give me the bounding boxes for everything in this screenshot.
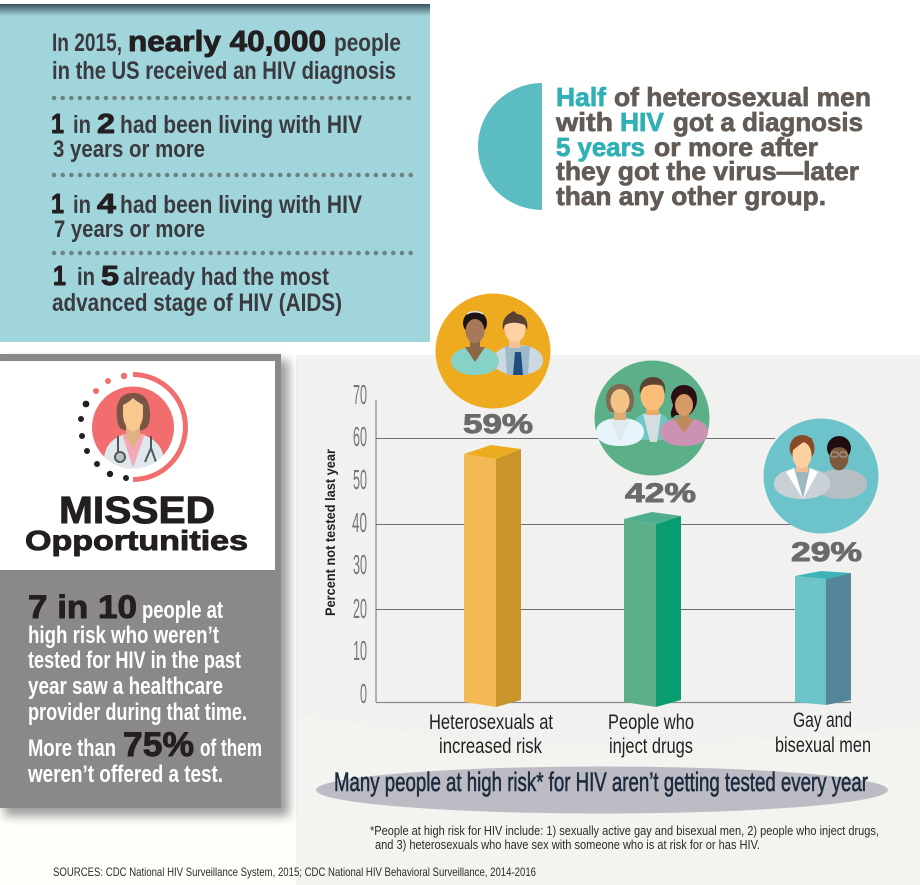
stat: 1 in 5 — [52, 260, 342, 317]
text: 7 in 10 statistic: high risk who weren’t — [28, 622, 219, 649]
text: 7 in 10 statistic — [28, 589, 247, 726]
panel: diagnosis statistics — [0, 4, 430, 342]
bar: gay and bisexual men 29% — [795, 571, 851, 705]
stat: 1 in 4: 4 — [97, 188, 117, 219]
text: more than 75 percent: weren’t offered a test. — [27, 761, 223, 788]
callout text: Half — [556, 82, 606, 112]
callout text: with — [555, 107, 613, 137]
sources: SOURCES: CDC National HIV Surveillance System, 2015; CDC National HIV Behavioral Surveillance, 2014-2016 — [53, 865, 536, 879]
woman — [451, 347, 499, 375]
callout text: of heterosexual men — [614, 82, 871, 112]
value: 59%: 59% — [463, 409, 533, 439]
bar chart: percent not tested last year: 60 — [353, 421, 367, 452]
icon: gay and bisexual men — [764, 418, 878, 534]
category labels — [429, 709, 871, 758]
heading: nearly 40,000 diagnoses: nearly 40,000 — [128, 26, 326, 58]
bar chart: percent not tested last year — [322, 294, 878, 758]
callout text: HIV — [620, 107, 665, 137]
value: 42%: 42% — [625, 478, 696, 508]
man right — [815, 469, 867, 499]
bar: people who inject drugs 42% — [624, 512, 681, 707]
icon: teal half circle — [478, 83, 542, 210]
category labels: People who — [608, 711, 694, 734]
panel: chart background — [296, 355, 920, 885]
heading: nearly 40,000 diagnoses: people — [334, 29, 401, 57]
bar chart: percent not tested last year: 10 — [353, 635, 367, 666]
stat: 1 in 4: in — [73, 191, 91, 219]
text: 7 in 10 statistic: year saw a healthcare — [28, 673, 223, 700]
stat: 1 in 2: 3 years or more — [53, 136, 205, 163]
callout text: or more after — [654, 132, 818, 162]
stat: 1 in 5: 5 — [101, 260, 119, 291]
callout text: got a diagnosis — [673, 107, 863, 137]
category labels: Gay and — [793, 709, 852, 732]
text: more than 75 percent: of them — [200, 735, 262, 762]
stat: 1 in 2: had been living with HIV — [120, 111, 362, 139]
stat: 1 in 4: had been living with HIV — [120, 191, 362, 219]
bar chart: percent not tested last year: 30 — [353, 549, 367, 580]
text: 7 in 10 statistic: provider during that time. — [28, 699, 247, 726]
stat: 1 in 2: 2 — [97, 108, 115, 139]
stat: 1 in 2: in — [73, 111, 91, 139]
stat: 1 in 2 — [51, 108, 362, 163]
text: 7 in 10 statistic: tested for HIV in the past — [28, 647, 241, 674]
bar: heterosexuals 59% — [464, 445, 521, 707]
bar chart: percent not tested last year: 40 — [352, 507, 367, 538]
bar chart: percent not tested last year: 70 — [353, 379, 367, 410]
icon: heterosexual couple — [436, 294, 550, 408]
stat: 1 in 4: 1 — [51, 188, 64, 219]
category labels: inject drugs — [609, 735, 693, 758]
y axis labels — [352, 379, 367, 709]
icon: people who inject drugs — [594, 360, 710, 476]
stat: 1 in 5: already had the most — [123, 263, 330, 291]
text: more than 75 percent: 75% — [123, 726, 194, 764]
value: 29%: 29% — [791, 537, 862, 567]
stat: 1 in 4: 7 years or more — [54, 216, 205, 243]
text: 7 in 10 statistic: 7 in 10 — [28, 589, 137, 625]
stat: 1 in 5: 1 — [53, 260, 66, 291]
category labels: increased risk — [439, 735, 542, 758]
icon: doctor — [78, 373, 185, 481]
stat: 1 in 4 — [51, 188, 362, 243]
heading: nearly 40,000 diagnoses — [52, 26, 401, 85]
woman left — [606, 384, 634, 412]
man — [630, 412, 673, 440]
bar chart: percent not tested last year: 20 — [353, 593, 367, 624]
callout text: they got the virus—later — [556, 156, 859, 186]
callout: half of heterosexual men — [478, 82, 871, 211]
category labels: Heterosexuals at — [429, 711, 553, 734]
category labels: bisexual men — [775, 734, 871, 757]
text: more than 75 percent: More than — [28, 735, 116, 762]
callout text: than any other group. — [556, 181, 826, 211]
text: 7 in 10 statistic: people at — [142, 597, 223, 624]
heading: nearly 40,000 diagnoses: in the US received an HIV diagnosis — [52, 57, 396, 85]
footnote: and 3) heterosexuals who have sex with someone who is at risk for or has HIV. — [375, 838, 760, 852]
man — [493, 345, 543, 375]
y axis title: Percent not tested last year — [322, 449, 338, 616]
stat: 1 in 5: advanced stage of HIV (AIDS) — [52, 289, 342, 317]
heading: nearly 40,000 diagnoses: In 2015, — [52, 29, 122, 57]
heading: MISSED: MISSED — [59, 490, 215, 532]
man left — [774, 468, 830, 499]
heading: Opportunities: Opportunities — [25, 525, 248, 556]
chart headline on ellipse — [316, 766, 888, 814]
stat: 1 in 5: in — [77, 263, 95, 291]
stat: 1 in 2: 1 — [51, 108, 64, 139]
footnote — [370, 824, 879, 852]
callout text — [555, 82, 871, 211]
bar chart: percent not tested last year: 50 — [353, 464, 367, 495]
panel: missed opportunities — [0, 354, 289, 816]
callout text: 5 years — [556, 132, 645, 162]
panel: white heading card — [0, 361, 275, 570]
text: more than 75 percent — [27, 726, 262, 788]
bar chart: percent not tested last year: 0 — [360, 678, 367, 709]
woman right — [671, 385, 697, 418]
